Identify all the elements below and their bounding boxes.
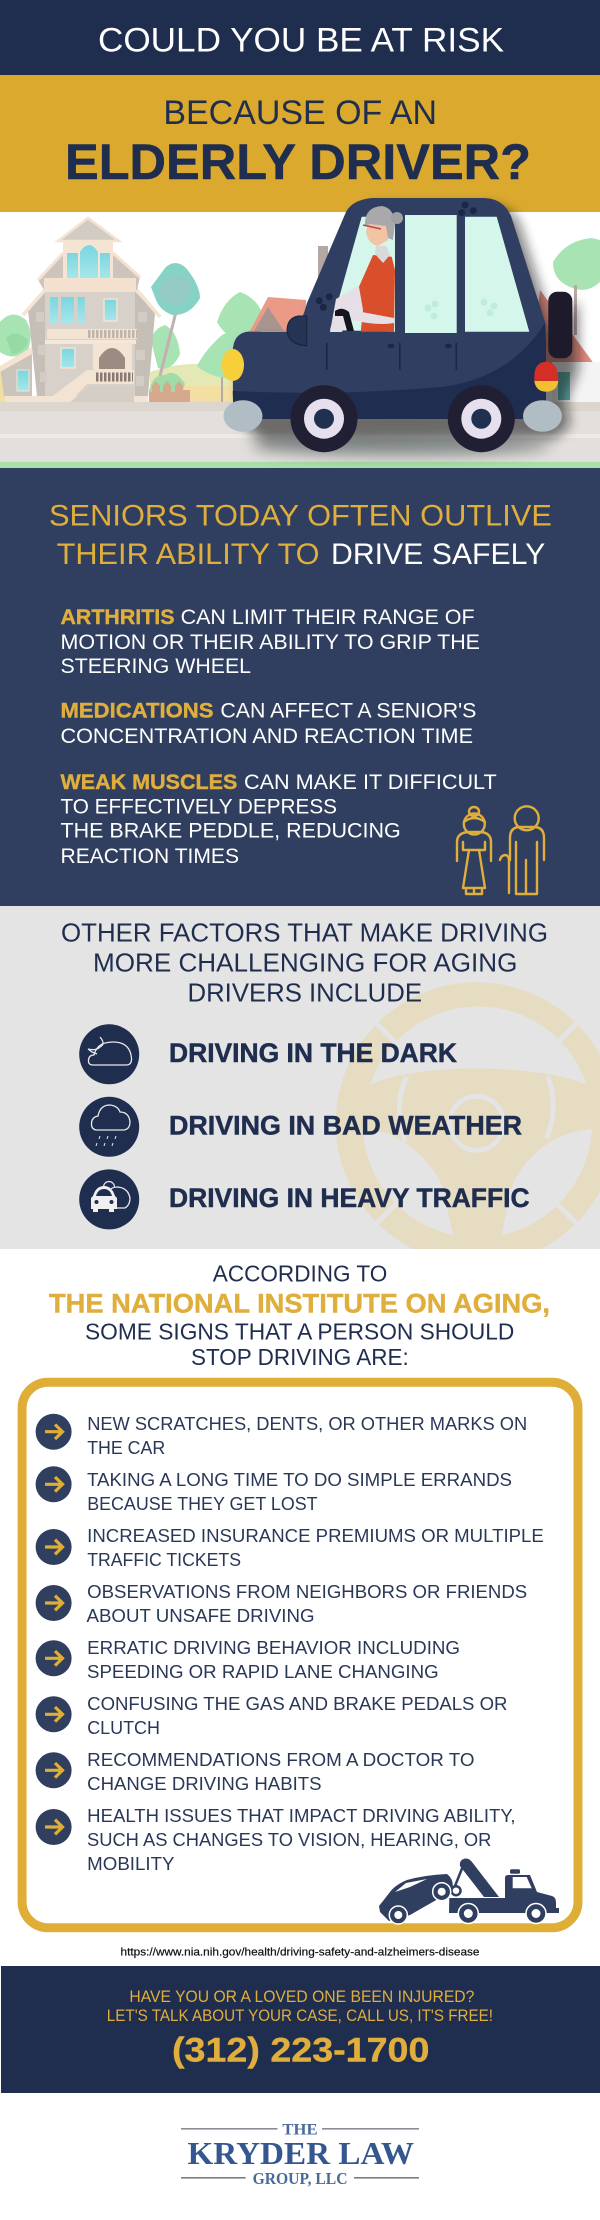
sign 7 — [36, 1749, 474, 1794]
text block: weak muscles: THE BRAKE PEDDLE, REDUCING — [60, 819, 401, 843]
heading — [61, 920, 548, 1008]
tail light — [534, 362, 558, 392]
heading: according to the national institute on aging — [49, 1261, 550, 1370]
label: dark: DRIVING IN THE DARK — [169, 1038, 457, 1068]
text block: weak muscles — [60, 770, 497, 868]
title band: because of an elderly driver: BECAUSE OF AN — [163, 94, 437, 132]
icon: heavy traffic — [79, 1169, 139, 1229]
sign 3 — [36, 1525, 544, 1570]
text block: medications: CAN AFFECT A SENIOR'S — [220, 699, 476, 723]
panel: other factors — [0, 906, 600, 1264]
sign 1: THE CAR — [87, 1437, 165, 1458]
sign 8: SUCH AS CHANGES TO VISION, HEARING, OR — [87, 1829, 491, 1850]
text block: arthritis: ARTHRITIS — [60, 605, 174, 629]
logo: the kryder law group: GROUP, LLC — [253, 2169, 348, 2188]
logo: the kryder law group: THE — [282, 2121, 318, 2138]
text block: medications — [60, 699, 476, 748]
icon: dark — [79, 1024, 139, 1084]
spare wheel — [548, 292, 572, 358]
text block: weak muscles: REACTION TIMES — [60, 844, 239, 868]
text block: medications: MEDICATIONS — [60, 699, 214, 723]
side mirror — [287, 316, 307, 346]
heading: according to the national institute on aging: ACCORDING TO — [213, 1261, 387, 1287]
sign 6: CONFUSING THE GAS AND BRAKE PEDALS OR — [87, 1693, 507, 1714]
heading: THEIR ABILITY TO — [57, 538, 320, 571]
call to action band: LET'S TALK ABOUT YOUR CASE, CALL US, IT'S FREE! — [107, 2007, 493, 2025]
panel: seniors outlive their ability — [0, 468, 600, 906]
icon: tow truck — [379, 1858, 559, 1924]
text block: arthritis: MOTION OR THEIR ABILITY TO GRIP THE — [60, 630, 480, 654]
car — [222, 198, 572, 452]
car body — [233, 198, 546, 419]
label: heavy traffic: DRIVING IN HEAVY TRAFFIC — [169, 1183, 530, 1213]
sign 6: CLUTCH — [87, 1717, 160, 1738]
icon: elderly couple — [457, 806, 544, 894]
driver — [330, 206, 403, 332]
heading: according to the national institute on aging: THE NATIONAL INSTITUTE ON AGING, — [49, 1289, 550, 1319]
sign 7: RECOMMENDATIONS FROM A DOCTOR TO — [87, 1749, 474, 1770]
header band: could you be at risk — [0, 0, 600, 75]
call to action band — [1, 1966, 600, 2093]
logo: the kryder law group: KRYDER LAW — [188, 2135, 414, 2171]
sign 8: MOBILITY — [87, 1853, 174, 1874]
sign 5: ERRATIC DRIVING BEHAVIOR INCLUDING — [87, 1637, 460, 1658]
panel: warning signs list — [22, 1382, 578, 1928]
sign 7: CHANGE DRIVING HABITS — [87, 1773, 322, 1794]
heading: SENIORS TODAY OFTEN OUTLIVE — [49, 500, 552, 533]
trees — [0, 238, 600, 402]
door seams and handles — [316, 202, 477, 370]
sign 2: TAKING A LONG TIME TO DO SIMPLE ERRANDS — [87, 1469, 512, 1490]
sign 8: HEALTH ISSUES THAT IMPACT DRIVING ABILITY, — [87, 1805, 515, 1826]
car shadow — [240, 206, 578, 456]
heading: OTHER FACTORS THAT MAKE DRIVING — [61, 920, 548, 948]
text block: weak muscles: WEAK MUSCLES — [60, 770, 237, 794]
icon: steering wheel watermark — [336, 982, 600, 1264]
fence — [149, 373, 190, 402]
sign 5: SPEEDING OR RAPID LANE CHANGING — [87, 1661, 439, 1682]
sign 8 — [36, 1805, 515, 1874]
sign 1: NEW SCRATCHES, DENTS, OR OTHER MARKS ON — [87, 1413, 527, 1434]
text block: medications: CONCENTRATION AND REACTION TIME — [60, 724, 473, 748]
sign 1 — [36, 1413, 527, 1458]
heading: according to the national institute on aging: SOME SIGNS THAT A PERSON SHOULD — [85, 1318, 514, 1344]
header band: could you be at risk: COULD YOU BE AT RISK — [98, 22, 504, 60]
neighbor houses — [250, 246, 600, 402]
source url: https://www.nia.nih.gov/health/driving-safety-and-alzheimers-disease — [120, 1947, 480, 1959]
wheels — [290, 385, 515, 452]
call to action band: HAVE YOU OR A LOVED ONE BEEN INJURED? — [129, 1988, 474, 2006]
text block: weak muscles: TO EFFECTIVELY DEPRESS — [60, 795, 337, 819]
logo: the kryder law group — [181, 2121, 419, 2188]
headlight — [222, 349, 244, 381]
text block: arthritis: STEERING WHEEL — [60, 654, 251, 678]
large house — [0, 218, 160, 402]
sign 6 — [36, 1693, 507, 1738]
heading — [49, 500, 552, 571]
heading: DRIVERS INCLUDE — [188, 980, 422, 1008]
text block: arthritis — [60, 605, 480, 678]
sign 4: OBSERVATIONS FROM NEIGHBORS OR FRIENDS — [87, 1581, 527, 1602]
title band: because of an elderly driver — [0, 75, 600, 212]
text block: arthritis: CAN LIMIT THEIR RANGE OF — [181, 605, 475, 629]
lower shade — [233, 323, 546, 419]
sign 4 — [36, 1581, 527, 1626]
bumpers — [224, 400, 562, 432]
heading: MORE CHALLENGING FOR AGING — [93, 950, 517, 978]
text block: weak muscles: CAN MAKE IT DIFFICULT — [244, 770, 497, 794]
sign 3: TRAFFIC TICKETS — [87, 1549, 241, 1570]
sign 2: BECAUSE THEY GET LOST — [87, 1493, 318, 1514]
sign 5 — [36, 1637, 460, 1682]
sign 3: INCREASED INSURANCE PREMIUMS OR MULTIPLE — [87, 1525, 544, 1546]
street background — [0, 364, 600, 468]
label: bad weather: DRIVING IN BAD WEATHER — [169, 1110, 522, 1140]
heading: according to the national institute on aging: STOP DRIVING ARE: — [191, 1344, 409, 1370]
icon: bad weather — [79, 1097, 139, 1157]
windows — [330, 215, 529, 333]
sign 2 — [36, 1466, 512, 1514]
sign 4: ABOUT UNSAFE DRIVING — [86, 1605, 314, 1626]
title band: because of an elderly driver: ELDERLY DRIVER? — [65, 134, 531, 190]
heading: DRIVE SAFELY — [331, 538, 545, 571]
illustration: street scene with elderly driver in car — [0, 198, 600, 468]
phone number: (312) 223-1700 — [172, 2032, 429, 2070]
